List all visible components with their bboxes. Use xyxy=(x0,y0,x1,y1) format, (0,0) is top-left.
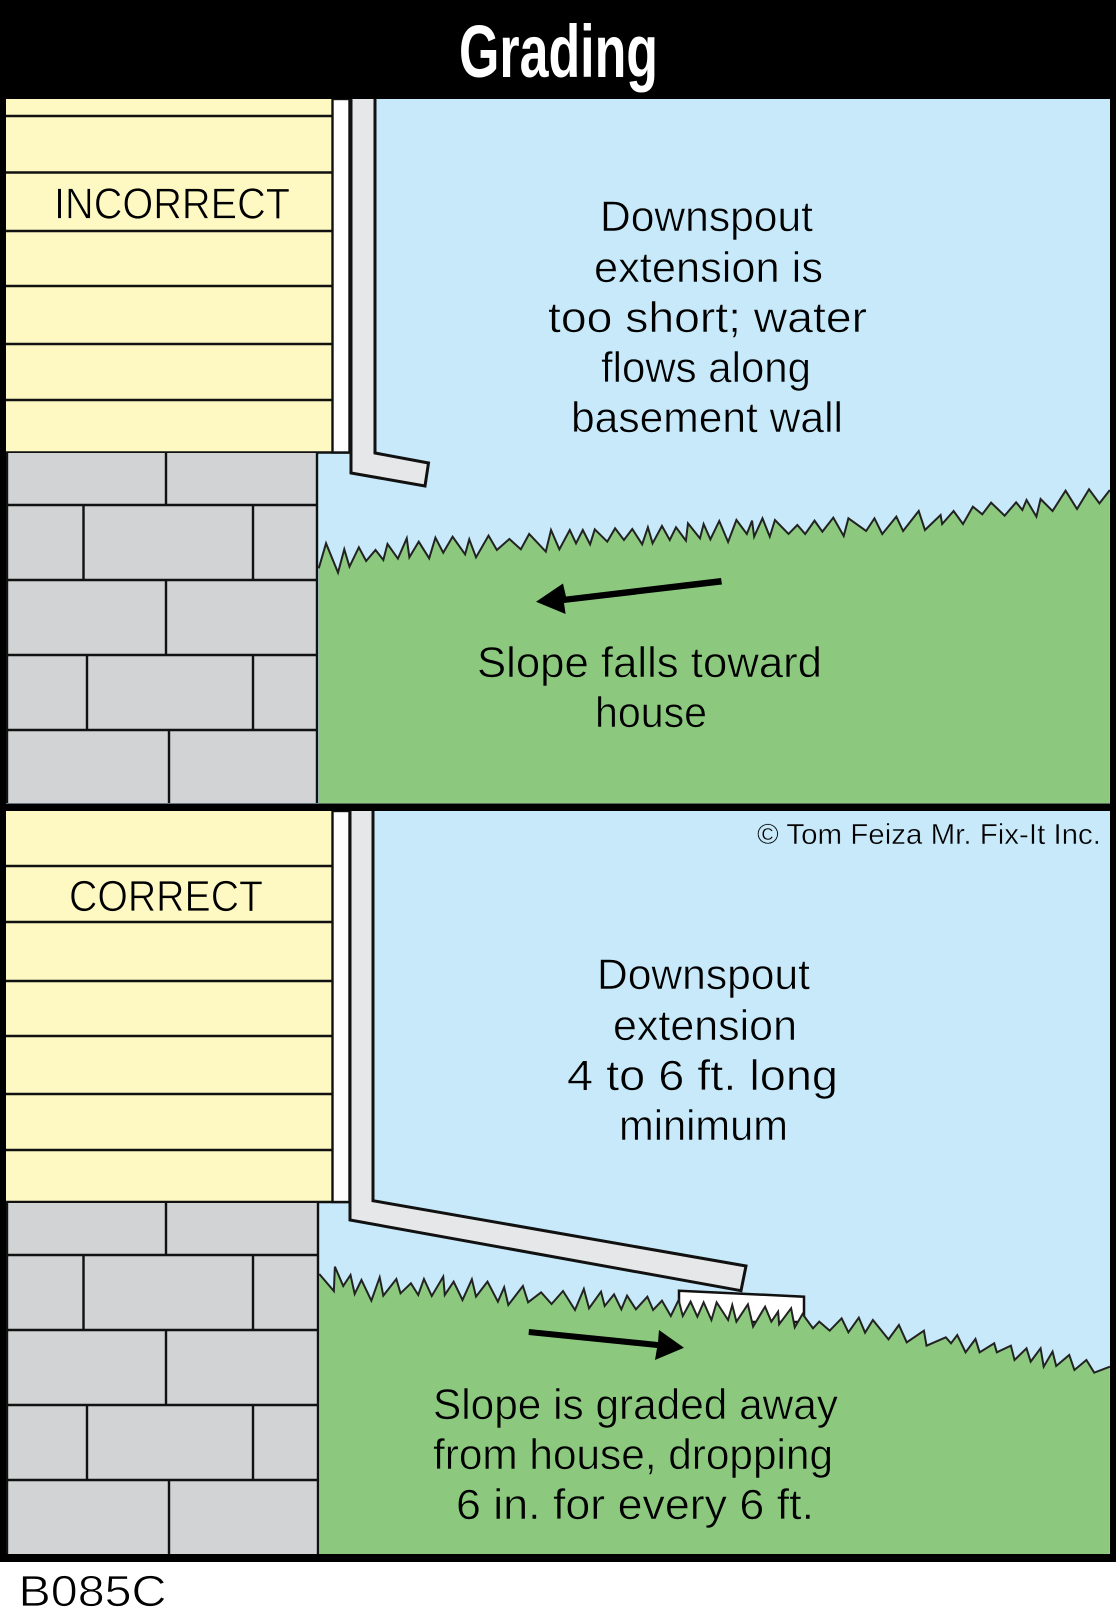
text: downspout too short: too short; water xyxy=(548,294,867,342)
title: Grading xyxy=(459,10,658,93)
concrete block foundation xyxy=(6,1203,318,1555)
text: slope graded away from house xyxy=(433,1381,838,1529)
label: CORRECT: CORRECT xyxy=(69,872,263,921)
panel: incorrect grading xyxy=(6,99,1110,804)
text: slope graded away from house: Slope is graded away xyxy=(433,1381,838,1429)
arrow: slope toward house xyxy=(536,578,722,614)
text: slope falls toward house: house xyxy=(595,689,707,737)
text: downspout too short: Downspout xyxy=(600,193,813,241)
text: downspout too short: flows along xyxy=(601,344,811,392)
sky background xyxy=(6,811,1110,1556)
splash block xyxy=(679,1291,804,1322)
downspout with long extension xyxy=(350,811,746,1291)
sky background xyxy=(6,99,1110,804)
text: downspout extension minimum xyxy=(567,951,838,1150)
text: slope graded away from house: from house, dropping xyxy=(433,1431,833,1479)
arrow: slope away from house xyxy=(528,1329,684,1360)
siding wall xyxy=(6,811,350,1202)
text: downspout extension minimum: 4 to 6 ft. long xyxy=(567,1052,838,1100)
grass slope toward house xyxy=(319,489,1110,803)
text: downspout extension minimum: Downspout xyxy=(597,951,810,999)
text: downspout too short xyxy=(548,193,867,442)
text: downspout extension minimum: minimum xyxy=(619,1102,788,1150)
text: slope falls toward house xyxy=(477,639,822,737)
copyright note: © Tom Feiza Mr. Fix-It Inc. xyxy=(757,819,1101,851)
downspout with short extension xyxy=(351,99,428,486)
title banner xyxy=(0,0,1116,99)
panel: correct grading xyxy=(6,811,1110,1556)
text: downspout too short: basement wall xyxy=(571,394,843,442)
text: slope falls toward house: Slope falls toward xyxy=(477,639,822,687)
siding wall xyxy=(6,99,350,453)
text: downspout extension minimum: extension xyxy=(613,1002,797,1050)
grass slope away from house xyxy=(319,1267,1110,1556)
concrete block foundation xyxy=(6,453,317,803)
text: downspout too short: extension is xyxy=(594,244,823,292)
label: INCORRECT: INCORRECT xyxy=(54,180,290,228)
text: slope graded away from house: 6 in. for every 6 ft. xyxy=(456,1481,814,1529)
